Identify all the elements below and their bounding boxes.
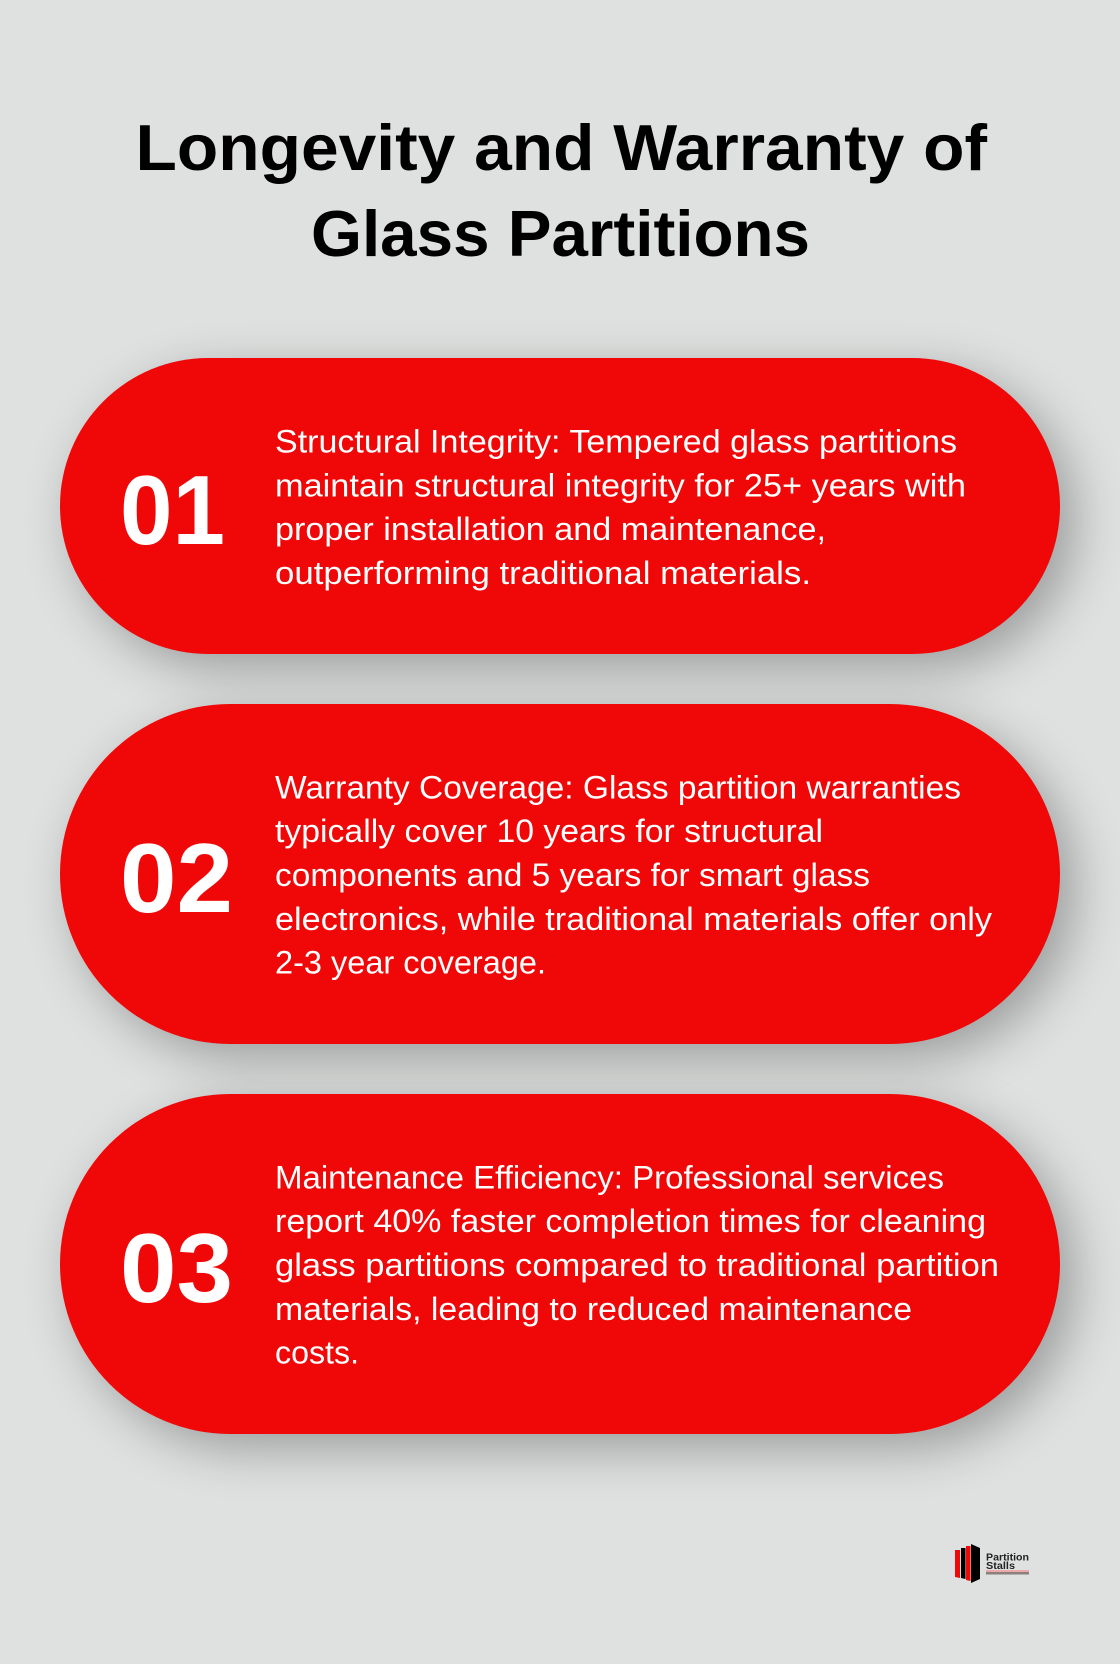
title: Glass Partitions bbox=[311, 197, 810, 270]
text block: structural integrity: outperforming traditional materials. bbox=[275, 555, 811, 591]
panel: structural integrity bbox=[60, 358, 1060, 654]
title: Longevity and Warranty of bbox=[136, 111, 987, 184]
number 03: 03 bbox=[120, 1213, 233, 1323]
brand name: Stalls bbox=[986, 1561, 1015, 1572]
text block: warranty coverage: 2-3 year coverage. bbox=[275, 945, 546, 981]
text block: warranty coverage: typically cover 10 years for structural bbox=[275, 813, 823, 849]
title bbox=[136, 111, 988, 270]
text block: maintenance efficiency: materials, leading to reduced maintenance bbox=[275, 1291, 912, 1327]
logo: Partition Stalls bbox=[955, 1544, 1029, 1583]
text block: maintenance efficiency: costs. bbox=[275, 1335, 359, 1371]
text block: maintenance efficiency: Maintenance Efficiency: Professional services bbox=[275, 1159, 944, 1195]
text block: maintenance efficiency bbox=[275, 1159, 999, 1371]
text block: warranty coverage: electronics, while traditional materials offer only bbox=[275, 901, 992, 937]
brand name: Partition bbox=[986, 1552, 1029, 1564]
brand name bbox=[986, 1552, 1029, 1572]
text block: structural integrity: Structural Integrity: Tempered glass partitions bbox=[275, 424, 957, 460]
number 02: 02 bbox=[120, 823, 233, 933]
text block: structural integrity: proper installation and maintenance, bbox=[275, 511, 826, 547]
number 01: 01 bbox=[120, 455, 225, 565]
text block: maintenance efficiency: report 40% faster completion times for cleaning bbox=[275, 1203, 986, 1239]
icon: partition panels bbox=[955, 1544, 980, 1583]
text block: warranty coverage bbox=[275, 769, 992, 981]
panel: maintenance efficiency bbox=[60, 1094, 1060, 1434]
panel: warranty coverage bbox=[60, 704, 1060, 1044]
text block: structural integrity bbox=[275, 424, 966, 591]
text block: maintenance efficiency: glass partitions compared to traditional partition bbox=[275, 1247, 999, 1283]
text block: warranty coverage: components and 5 years for smart glass bbox=[275, 857, 870, 893]
tagline bar bbox=[986, 1570, 1029, 1574]
text block: warranty coverage: Warranty Coverage: Glass partition warranties bbox=[275, 769, 961, 805]
text block: structural integrity: maintain structural integrity for 25+ years with bbox=[275, 467, 966, 503]
